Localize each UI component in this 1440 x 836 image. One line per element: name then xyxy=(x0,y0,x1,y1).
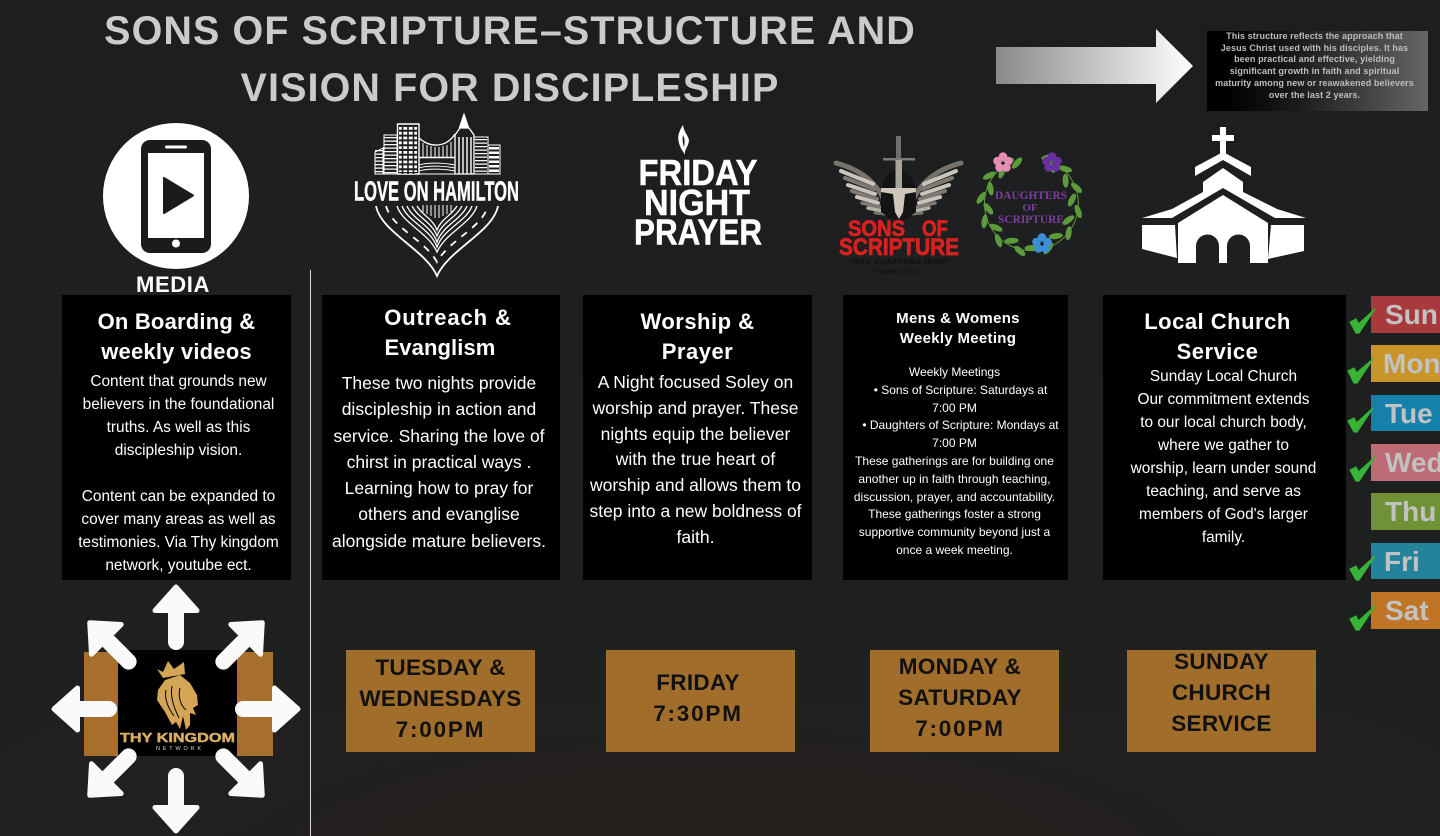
panel heading: Local Church xyxy=(1144,309,1291,334)
panel body: another up in faith through teaching, xyxy=(858,472,1051,486)
schedule: tuesday and wednesday: TUESDAY & xyxy=(375,655,506,680)
panel body: truths. As well as this xyxy=(107,418,250,436)
panel body: others and evanglise xyxy=(358,504,520,524)
day tab: Thursday xyxy=(1371,493,1440,530)
panel body: testimonies. Via Thy kingdom xyxy=(78,534,279,550)
logo: friday night prayer: NIGHT xyxy=(644,182,750,223)
panel body: faith. xyxy=(677,527,714,547)
day tab: Tuesday xyxy=(1371,395,1440,431)
panel body: chirst in practical ways . xyxy=(347,452,531,472)
panel body xyxy=(1130,368,1316,546)
panel body: Our commitment extends xyxy=(1138,391,1309,408)
panel body: 7:00 PM xyxy=(932,401,977,415)
day tab: Saturday xyxy=(1371,592,1440,629)
logo: sons of scripture: SCRIPTURE xyxy=(839,234,959,261)
day tab: Wednesday xyxy=(1371,444,1440,481)
panel body xyxy=(332,373,546,551)
logo: sons of scripture: OF xyxy=(922,216,948,241)
panel body: worship and allows them to xyxy=(590,475,801,495)
callout: structure note: Jesus Christ used with his disciples. It has xyxy=(1221,43,1408,53)
panel heading xyxy=(98,309,255,364)
panel heading: Mens & Womens xyxy=(896,310,1020,327)
panel body: service. Sharing the love of xyxy=(333,426,545,446)
check marks xyxy=(1348,309,1375,630)
panel body: • Sons of Scripture: Saturdays at xyxy=(874,383,1047,397)
schedule: friday: 7:30PM xyxy=(653,701,743,726)
radiating arrows xyxy=(54,587,298,831)
panel heading: Weekly Meeting xyxy=(900,330,1016,347)
logo: friday night prayer: FRIDAY xyxy=(638,152,758,193)
icon: media phone xyxy=(103,123,249,269)
schedule: friday xyxy=(606,650,795,752)
title: SONS OF SCRIPTURE–STRUCTURE AND xyxy=(104,9,916,53)
panel body: members of God's larger xyxy=(1139,506,1308,523)
panel: weekly meeting xyxy=(843,295,1068,580)
panel body: Weekly Meetings xyxy=(909,365,1000,379)
panel body: teaching, and serve as xyxy=(1146,483,1301,500)
panel heading: Prayer xyxy=(662,339,733,364)
panel body: Content can be expanded to xyxy=(82,488,275,504)
callout: structure note: maturity among new or reawakened believers xyxy=(1215,78,1414,88)
panel body: Content that grounds new xyxy=(90,372,267,390)
lion head xyxy=(157,675,198,730)
wordmark: SONS xyxy=(848,216,905,241)
panel body: 7:00 PM xyxy=(932,436,977,450)
panel body: believers in the foundational xyxy=(83,396,274,412)
callout: structure note xyxy=(1207,31,1428,111)
network name: THY KINGDOM xyxy=(120,731,235,745)
day tab: Saturday: Sat xyxy=(1385,595,1429,626)
lion crown xyxy=(157,661,185,678)
panel body: nights equip the believer xyxy=(601,424,790,444)
logo: love on hamilton xyxy=(354,113,519,276)
callout: structure note: over the last 2 years. xyxy=(1269,90,1360,100)
panel body: step into a new boldness of xyxy=(589,501,802,521)
schedule: monday and saturday: SATURDAY xyxy=(898,685,1022,710)
day tab: Monday: Mon xyxy=(1383,348,1440,379)
vertical divider xyxy=(310,270,311,836)
panel body: network, youtube ect. xyxy=(105,556,252,574)
panel heading: weekly videos xyxy=(101,339,252,364)
callout: structure note: been practical and effective, yielding xyxy=(1234,54,1395,64)
panel heading: Service xyxy=(1177,339,1258,364)
check: Sunday xyxy=(1350,309,1375,333)
panel body: alongside mature believers. xyxy=(332,531,546,551)
panel heading: Evanglism xyxy=(385,335,495,360)
pink flower xyxy=(993,152,1013,172)
right wing xyxy=(912,163,961,214)
panel body xyxy=(78,372,279,574)
check: Tuesday xyxy=(1348,408,1373,432)
schedule: tuesday and wednesday: 7:00PM xyxy=(396,717,485,742)
check: Saturday xyxy=(1350,606,1375,630)
panel: outreach xyxy=(322,295,560,580)
panel: on boarding xyxy=(62,295,291,580)
panel body xyxy=(854,365,1059,557)
icon: church xyxy=(1142,127,1306,263)
logo: friday night prayer: PRAYER xyxy=(634,212,762,252)
wreath wordmark xyxy=(995,188,1067,226)
panel body: cover many areas as well as xyxy=(81,510,276,528)
logo: sons of scripture: Proverbs 27:17 xyxy=(874,269,922,276)
wreath stem xyxy=(984,159,1078,251)
blue flower xyxy=(1032,233,1052,253)
panel body: Sunday Local Church xyxy=(1150,368,1297,385)
title: VISION FOR DISCIPLESHIP xyxy=(241,66,779,110)
day tab: Sunday xyxy=(1371,296,1440,333)
schedule: tuesday and wednesday: WEDNESDAYS xyxy=(359,686,522,711)
callout: structure note: This structure reflects the approach that xyxy=(1226,31,1403,41)
panel body: worship and prayer. These xyxy=(593,398,798,418)
helmet and sword xyxy=(881,136,916,220)
schedule: sunday: SERVICE xyxy=(1171,711,1272,736)
panel body: These two nights provide xyxy=(342,373,536,393)
logo: friday night prayer xyxy=(634,125,762,252)
wreath leaves xyxy=(975,154,1084,258)
panel body: to our local church body, xyxy=(1140,414,1307,431)
panel body: discussion, prayer, and accountability. xyxy=(854,490,1055,504)
panel body: where we gather to xyxy=(1158,437,1289,454)
logo: love on hamilton: LOVE ON HAMILTON xyxy=(354,176,519,206)
panel body: supportive community beyond just a xyxy=(859,525,1050,539)
panel heading xyxy=(1144,309,1291,364)
wreath wordmark: OF xyxy=(1022,202,1038,214)
day tab: Thursday: Thu xyxy=(1385,496,1436,527)
panel heading xyxy=(384,305,512,360)
logo: sons of scripture xyxy=(836,136,961,276)
panel body: with the true heart of xyxy=(616,449,775,469)
panel body: once a week meeting. xyxy=(896,543,1013,557)
schedule: monday and saturday xyxy=(870,650,1059,752)
day tab: Monday xyxy=(1371,345,1440,382)
purple flower xyxy=(1042,152,1062,172)
check: Wednesday xyxy=(1350,457,1375,481)
panel heading: On Boarding & xyxy=(98,309,255,334)
check: Friday xyxy=(1350,556,1375,580)
left wing xyxy=(836,163,885,214)
panel body: • Daughters of Scripture: Mondays at xyxy=(862,418,1059,432)
schedule: monday and saturday: MONDAY & xyxy=(899,654,1021,679)
panel heading xyxy=(640,309,755,364)
panel body: These gatherings foster a strong xyxy=(868,507,1041,521)
schedule: sunday: CHURCH xyxy=(1172,680,1271,705)
panel body: These gatherings are for building one xyxy=(855,454,1054,468)
schedule: monday and saturday: 7:00PM xyxy=(915,716,1005,741)
panel body: A Night focused Soley on xyxy=(598,372,793,392)
media label: MEDIA xyxy=(136,272,210,297)
schedule: sunday: SUNDAY xyxy=(1174,649,1269,674)
schedule: friday: FRIDAY xyxy=(656,670,740,695)
day tab: Tuesday: Tue xyxy=(1385,398,1433,429)
logo: thy kingdom network: NETWORK xyxy=(156,746,201,752)
panel heading: Outreach & xyxy=(384,305,512,330)
logo: daughters of scripture xyxy=(975,152,1084,258)
wreath wordmark: DAUGHTERS xyxy=(995,188,1067,202)
panel heading xyxy=(896,310,1020,347)
schedule: sunday xyxy=(1127,650,1316,752)
panel body: worship, learn under sound xyxy=(1131,460,1316,477)
day tab: Friday xyxy=(1371,543,1440,579)
panel body: family. xyxy=(1202,529,1245,546)
panel body: Learning how to pray for xyxy=(345,478,533,498)
callout: structure note: significant growth in faith and spiritual xyxy=(1230,66,1399,76)
logo: thy kingdom network xyxy=(54,587,298,831)
panel: worship xyxy=(583,295,812,580)
logo: sons of scripture: "IRON SHARPENS IRON" xyxy=(846,259,950,266)
panel heading: Worship & xyxy=(640,309,755,334)
day tab: Friday: Fri xyxy=(1384,546,1420,577)
day tab: Sunday: Sun xyxy=(1385,299,1438,330)
panel: local church xyxy=(1103,295,1346,580)
arrow: pointing to note xyxy=(996,29,1193,103)
panel body xyxy=(589,372,802,547)
panel body: discipleship vision. xyxy=(115,442,242,458)
check: Monday xyxy=(1348,359,1373,383)
wreath wordmark: SCRIPTURE xyxy=(998,212,1064,226)
title xyxy=(104,9,916,110)
panel body: discipleship in action and xyxy=(342,399,536,419)
schedule: tuesday and wednesday xyxy=(346,650,535,752)
